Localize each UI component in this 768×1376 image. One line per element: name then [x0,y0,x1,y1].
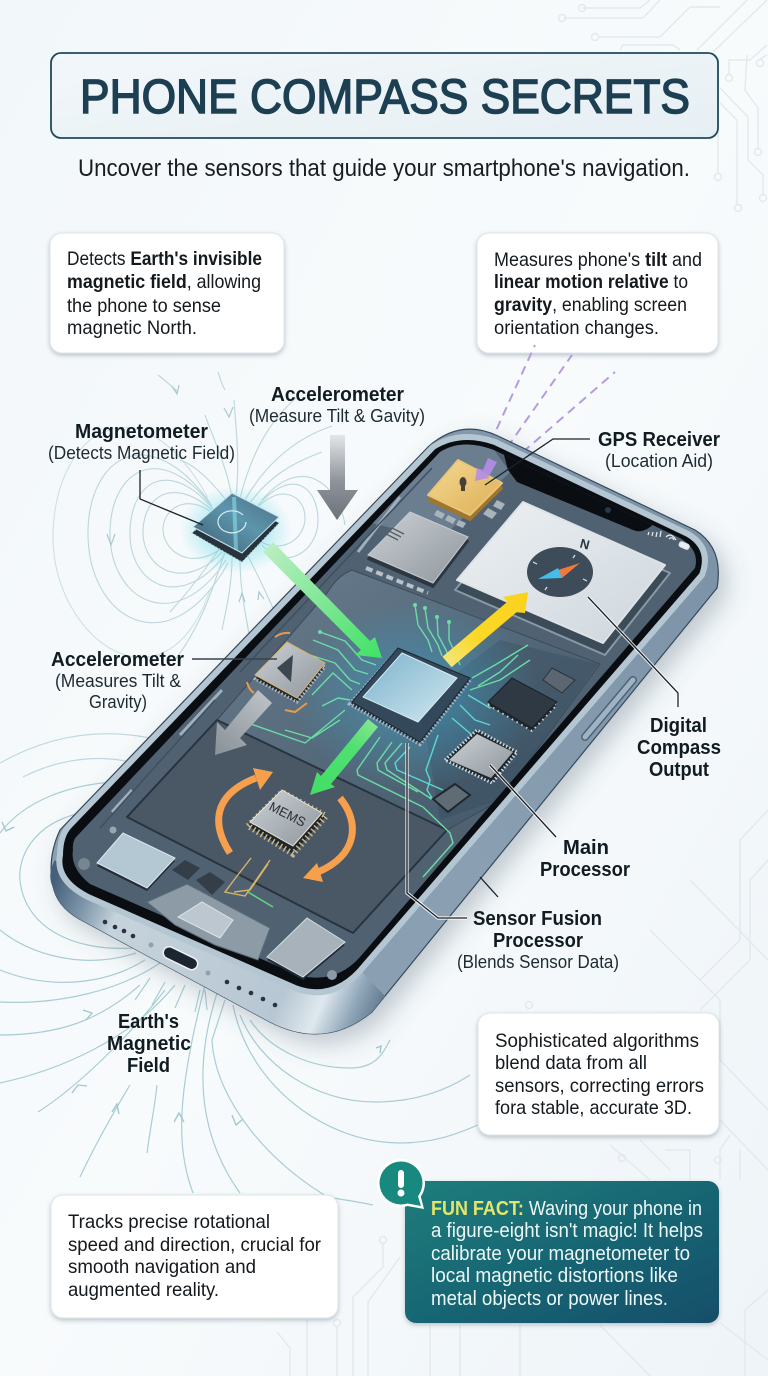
mems chip [225,790,326,907]
green arrow from magnetometer [263,542,382,658]
label: sensor fusion processor: Sensor Fusion [473,908,602,930]
bottom chips and bracket [78,826,345,980]
small tick mark [480,877,498,897]
magnetic field lines around magnetometer [53,372,345,660]
label: accelerometer left: (Measures Tilt & [55,671,181,691]
phone [50,429,718,1034]
callout: magnetometer explanation [50,233,284,353]
mems chip: MEMS [267,799,309,830]
label: magnetometer: Magnetometer [75,421,208,443]
fun fact panel [405,1181,719,1323]
label: digital compass output [588,597,721,781]
rim and black bezel [59,437,705,992]
notch [504,455,652,532]
side button [585,680,633,737]
yellow arrow to compass [442,592,528,667]
label: accelerometer left [51,649,277,712]
fun fact panel: a figure-eight isn't magic! It helps [431,1220,703,1242]
small black chips [433,668,575,812]
fun fact panel: local magnetic distortions like [431,1265,678,1287]
background circuit lines [277,0,768,1376]
central sensor fusion chip [350,648,470,744]
label: main processor [490,765,630,881]
gray arrow from accelerometer label [317,435,358,520]
label: accelerometer top: Accelerometer [271,384,404,406]
label: digital compass output: Digital [650,715,707,737]
interior board [73,444,696,978]
status icons [648,531,690,550]
callout: magnetometer explanation: magnetic North. [67,317,197,339]
label: main processor: Main [563,837,609,859]
callout: gyroscope explanation: speed and direction, crucial for [68,1234,321,1256]
label: accelerometer left: Accelerometer [51,649,184,671]
label: digital compass output: Output [649,759,709,781]
label: accelerometer top: (Measure Tilt & Gavity) [249,406,425,426]
digital compass panel: N [578,536,591,553]
compass dial [527,547,593,597]
mems rotation arrows [219,768,352,882]
fun fact panel: metal objects or power lines. [431,1288,668,1310]
callout: accelerometer explanation: linear motion relative to [494,271,688,293]
callout: accelerometer explanation: orientation changes. [494,317,659,339]
gray arrow to lower left [215,690,272,755]
title banner: PHONE COMPASS SECRETS [80,71,690,124]
bottom band of phone body [50,860,385,1034]
label: magnetometer [48,421,235,525]
gps signal dashed lines [478,345,615,472]
magnetometer glow [180,486,292,574]
rail detail [112,497,400,812]
purple arrow [475,458,497,481]
callout: gyroscope explanation: augmented reality. [68,1279,219,1301]
label: earth's magnetic field: Field [127,1055,170,1077]
subtitle: Uncover the sensors that guide your smartphone's navigation. [78,155,690,182]
label: digital compass output: Compass [637,737,721,759]
main processor chip [445,730,517,783]
green arrow from sensor fusion to mems [310,719,378,795]
top interior sheen [372,444,510,529]
orange bracket accents [247,633,307,712]
callout: gyroscope explanation: Tracks precise rotational [68,1211,270,1233]
label: gps receiver [485,429,720,485]
label: gps receiver: GPS Receiver [598,429,720,451]
label: accelerometer left: Gravity) [89,692,147,712]
callout: sensor fusion explanation: Sophisticated algorithms [495,1030,699,1052]
label: sensor fusion processor: (Blends Sensor Data) [457,952,619,972]
label: accelerometer top [249,384,425,426]
callout: accelerometer explanation: Measures phone's tilt and [494,249,702,271]
label: main processor: Processor [540,859,630,881]
grey memory chip [366,512,468,593]
callout: gyroscope explanation [51,1195,338,1318]
accelerometer chip [255,642,325,702]
fun fact panel: FUN FACT: Waving your phone in [431,1198,702,1220]
callout: gyroscope explanation: smooth navigation and [68,1256,256,1278]
icon: exclamation badge [377,1159,425,1209]
label: earth's magnetic field: Earth's [118,1011,179,1033]
label: gps receiver: (Location Aid) [605,451,713,471]
callout: sensor fusion explanation [478,1013,719,1135]
callout: accelerometer explanation: gravity, enabling screen [494,294,687,316]
callout: sensor fusion explanation: sensors, correcting errors [495,1075,704,1097]
earth's magnetic field lines [0,734,478,1205]
title banner [51,53,718,138]
callout: sensor fusion explanation: fora stable, accurate 3D. [495,1097,692,1119]
label: sensor fusion processor: Processor [493,930,583,952]
callout: accelerometer explanation [477,233,718,353]
label: sensor fusion processor [407,743,619,972]
fun fact panel: calibrate your magnetometer to [431,1243,690,1265]
digital compass panel [455,502,670,655]
label: earth's magnetic field: Magnetic [107,1033,191,1055]
gold gps chip [428,458,505,528]
upper circuit board [217,570,600,830]
lower slab [127,720,447,933]
magnetometer chip [192,493,279,562]
charging port and speaker holes [103,920,277,1007]
phone body [51,429,718,1034]
callout: magnetometer explanation: magnetic field, allowing [67,271,261,293]
callout: sensor fusion explanation: blend data from all [495,1052,647,1074]
label: earth's magnetic field [107,1011,191,1077]
callout: magnetometer explanation: Detects Earth's invisible [67,248,262,270]
circuit traces [245,603,530,877]
label: magnetometer: (Detects Magnetic Field) [48,443,235,463]
callout: magnetometer explanation: the phone to sense [67,295,221,317]
